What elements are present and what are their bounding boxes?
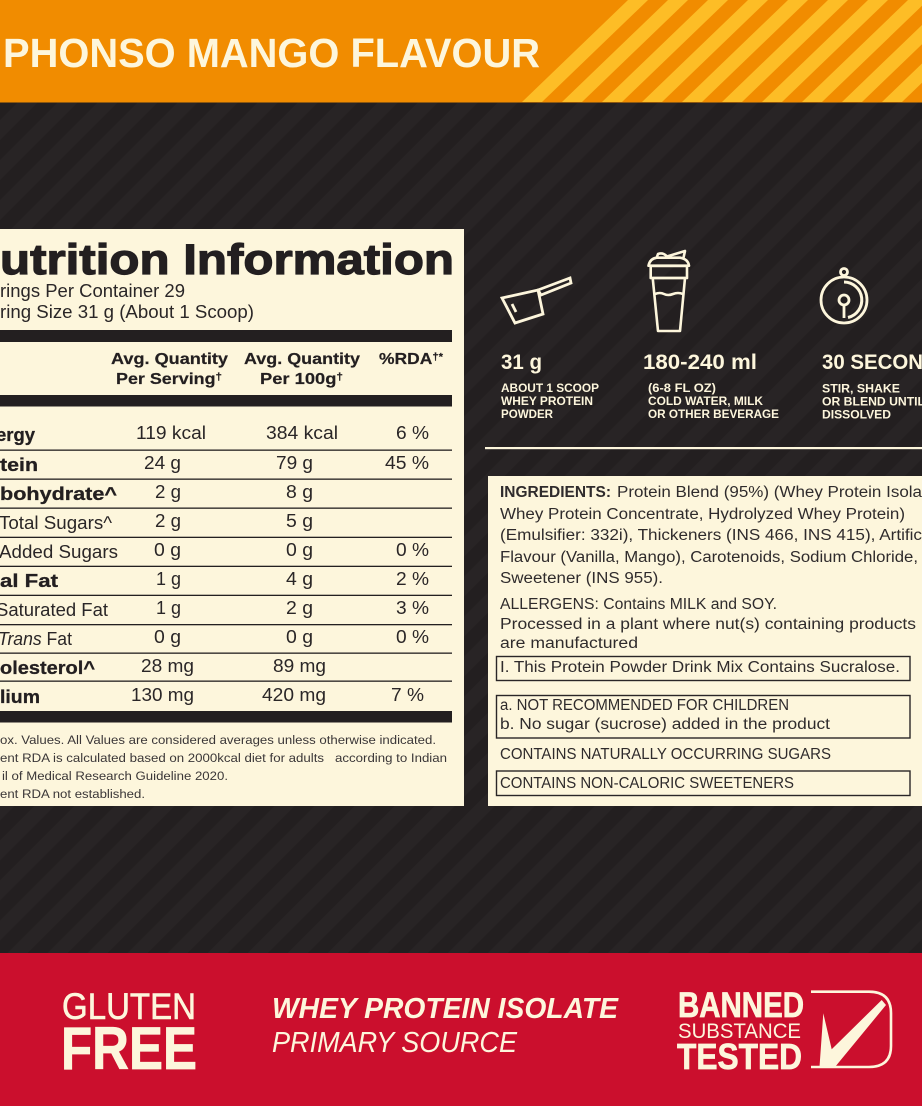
step: 180-240 ml: COLD WATER, MILK [648, 394, 763, 408]
row: energy: 6 % [396, 422, 429, 443]
table column headers: †* [432, 352, 443, 363]
row: cholesterol: 28 mg [141, 655, 194, 676]
banned substance tested badge: BANNED [678, 986, 804, 1025]
row: total fat: 2 % [396, 568, 429, 589]
panel: nutrition information [0, 229, 464, 806]
allergens text [500, 596, 916, 652]
notice box: sucralose [496, 656, 910, 680]
ingredients text: Flavour (Vanilla, Mango), Carotenoids, Sodium Chloride, [500, 549, 918, 566]
row: protein [0, 452, 429, 475]
row: energy: 119 kcal [136, 422, 206, 443]
row: added sugars: 0 % [396, 539, 429, 560]
banned substance tested badge: TESTED [677, 1036, 802, 1077]
footnotes: ox. Values. All Values are considered averages unless otherwise indicated. [0, 733, 436, 747]
row: cholesterol [0, 655, 326, 678]
header title: PHONSO MANGO FLAVOUR [3, 30, 540, 76]
row: total sugars [0, 510, 313, 533]
row: total fat: 4 g [286, 568, 313, 589]
notice box: non-caloric sweeteners: CONTAINS NON-CALORIC SWEETENERS [500, 775, 794, 792]
table column headers [111, 351, 443, 388]
allergens text: ALLERGENS: Contains MILK and SOY. [500, 596, 777, 613]
footnotes: il of Medical Research Guideline 2020. [2, 769, 228, 783]
row: cholesterol: 89 mg [273, 655, 326, 676]
row: total sugars: Total Sugars^ [0, 512, 112, 533]
banned substance tested badge [677, 986, 891, 1077]
step: 180-240 ml: OR OTHER BEVERAGE [648, 407, 779, 421]
row: saturated fat: 2 g [286, 597, 313, 618]
whey protein isolate claim: WHEY PROTEIN ISOLATE [272, 993, 620, 1025]
footnotes: ent RDA is calculated based on 2000kcal diet for adults according to Indian [0, 751, 447, 765]
row: saturated fat [0, 597, 429, 620]
icon: shaker bottle [648, 251, 689, 331]
serving information: ring Size 31 g (About 1 Scoop) [0, 301, 254, 322]
icon: timer [821, 268, 867, 323]
row: total fat: al Fat [0, 570, 58, 591]
row: total fat [0, 568, 429, 591]
step: 31 g: POWDER [501, 407, 553, 421]
table column headers: Avg. Quantity [111, 351, 228, 368]
table column headers: Per 100g [260, 371, 325, 388]
whey protein isolate claim: PRIMARY SOURCE [272, 1027, 518, 1059]
gluten free badge: FREE [61, 1015, 197, 1082]
row: trans fat: 0 % [396, 626, 429, 647]
header diagonal stripes [522, 0, 922, 102]
table column headers: Avg. Quantity [244, 351, 360, 368]
row: added sugars: Added Sugars [0, 541, 118, 562]
footnotes [0, 733, 447, 801]
step: 31 g: WHEY PROTEIN [501, 394, 593, 408]
row: cholesterol: olesterol^ [0, 657, 95, 678]
whey protein isolate claim [272, 993, 620, 1059]
notice box: children and sugar: b. No sugar (sucrose) added in the product [500, 716, 831, 733]
row: carbohydrate: 2 g [155, 481, 181, 502]
banned substance tested badge: SUBSTANCE [678, 1020, 801, 1043]
notice box: children and sugar [496, 696, 910, 738]
row: trans fat: Trans Fat [0, 628, 72, 649]
row: sodium: 130 mg [131, 684, 194, 705]
row: sodium [0, 684, 424, 707]
row: saturated fat: 3 % [396, 597, 429, 618]
dark background panel [0, 102, 922, 953]
table column headers: Per Serving [116, 371, 202, 388]
notice box: non-caloric sweeteners [496, 771, 910, 796]
step: 30 seconds: DISSOLVED [822, 408, 891, 422]
gluten free badge: GLUTEN [62, 986, 196, 1027]
row: trans fat: 0 g [154, 626, 181, 647]
ingredients text: INGREDIENTS: [500, 484, 611, 501]
row: protein: 45 % [385, 452, 429, 473]
step: 180-240 ml [643, 351, 779, 421]
row: energy: 384 kcal [266, 422, 338, 443]
ingredients text [500, 484, 922, 587]
row: energy [0, 422, 429, 445]
row: protein: tein [0, 454, 38, 475]
icon: check box [811, 992, 891, 1067]
step: 180-240 ml: (6-8 FL OZ) [648, 381, 716, 395]
table column headers: † [336, 372, 343, 383]
ingredients text: Sweetener (INS 955). [500, 570, 663, 587]
row: protein: 24 g [144, 452, 181, 473]
step: 31 g: ABOUT 1 SCOOP [501, 381, 599, 395]
ingredients text: Whey Protein Concentrate, Hydrolyzed Whey Protein) [500, 506, 905, 523]
allergens text: are manufactured [500, 635, 638, 652]
naturally occurring sugars: CONTAINS NATURALLY OCCURRING SUGARS [500, 746, 831, 763]
row: sodium: 7 % [391, 684, 424, 705]
footnotes: ent RDA not established. [0, 787, 145, 801]
row: added sugars: 0 g [154, 539, 181, 560]
row: carbohydrate: bohydrate^ [0, 483, 117, 504]
ingredients text: (Emulsifier: 332i), Thickeners (INS 466, INS 415), Artific [500, 527, 922, 544]
notice box: children and sugar: a. NOT RECOMMENDED FOR CHILDREN [500, 697, 789, 714]
header band [0, 0, 922, 102]
row: protein: 79 g [276, 452, 313, 473]
table column headers: %RDA [379, 351, 426, 368]
serving information: rings Per Container 29 [0, 280, 185, 301]
step: 30 seconds: OR BLEND UNTIL [822, 394, 922, 408]
row: sodium: 420 mg [262, 684, 326, 705]
step: 31 g [501, 351, 599, 421]
icon: scoop [502, 278, 571, 323]
step: 180-240 ml: 180-240 ml [643, 351, 757, 374]
row: carbohydrate: 8 g [286, 481, 313, 502]
nutrition heading: utrition Information [0, 237, 454, 284]
row: trans fat: 0 g [286, 626, 313, 647]
row: added sugars: 0 g [286, 539, 313, 560]
step: 30 seconds: STIR, SHAKE [822, 382, 900, 396]
row: trans fat [0, 626, 429, 649]
allergens text: Processed in a plant where nut(s) containing products [500, 616, 916, 633]
row: total fat: 1 g [156, 568, 181, 589]
row: carbohydrate [0, 481, 313, 504]
table column headers: † [216, 372, 222, 383]
row: sodium: lium [0, 686, 40, 707]
step: 31 g: 31 g [501, 351, 542, 374]
notice box: sucralose: I. This Protein Powder Drink Mix Contains Sucralose. [500, 659, 900, 676]
row: added sugars [0, 539, 429, 562]
row: total sugars: 2 g [155, 510, 181, 531]
step: 30 seconds [822, 351, 922, 422]
serving information [0, 280, 254, 322]
row: total sugars: 5 g [286, 510, 313, 531]
table rules [0, 330, 452, 722]
ingredients text: Protein Blend (95%) (Whey Protein Isola [617, 484, 922, 501]
row: saturated fat: 1 g [156, 597, 181, 618]
panel: ingredients [488, 476, 922, 806]
gluten free badge [61, 986, 197, 1082]
bottom red band [0, 953, 922, 1106]
